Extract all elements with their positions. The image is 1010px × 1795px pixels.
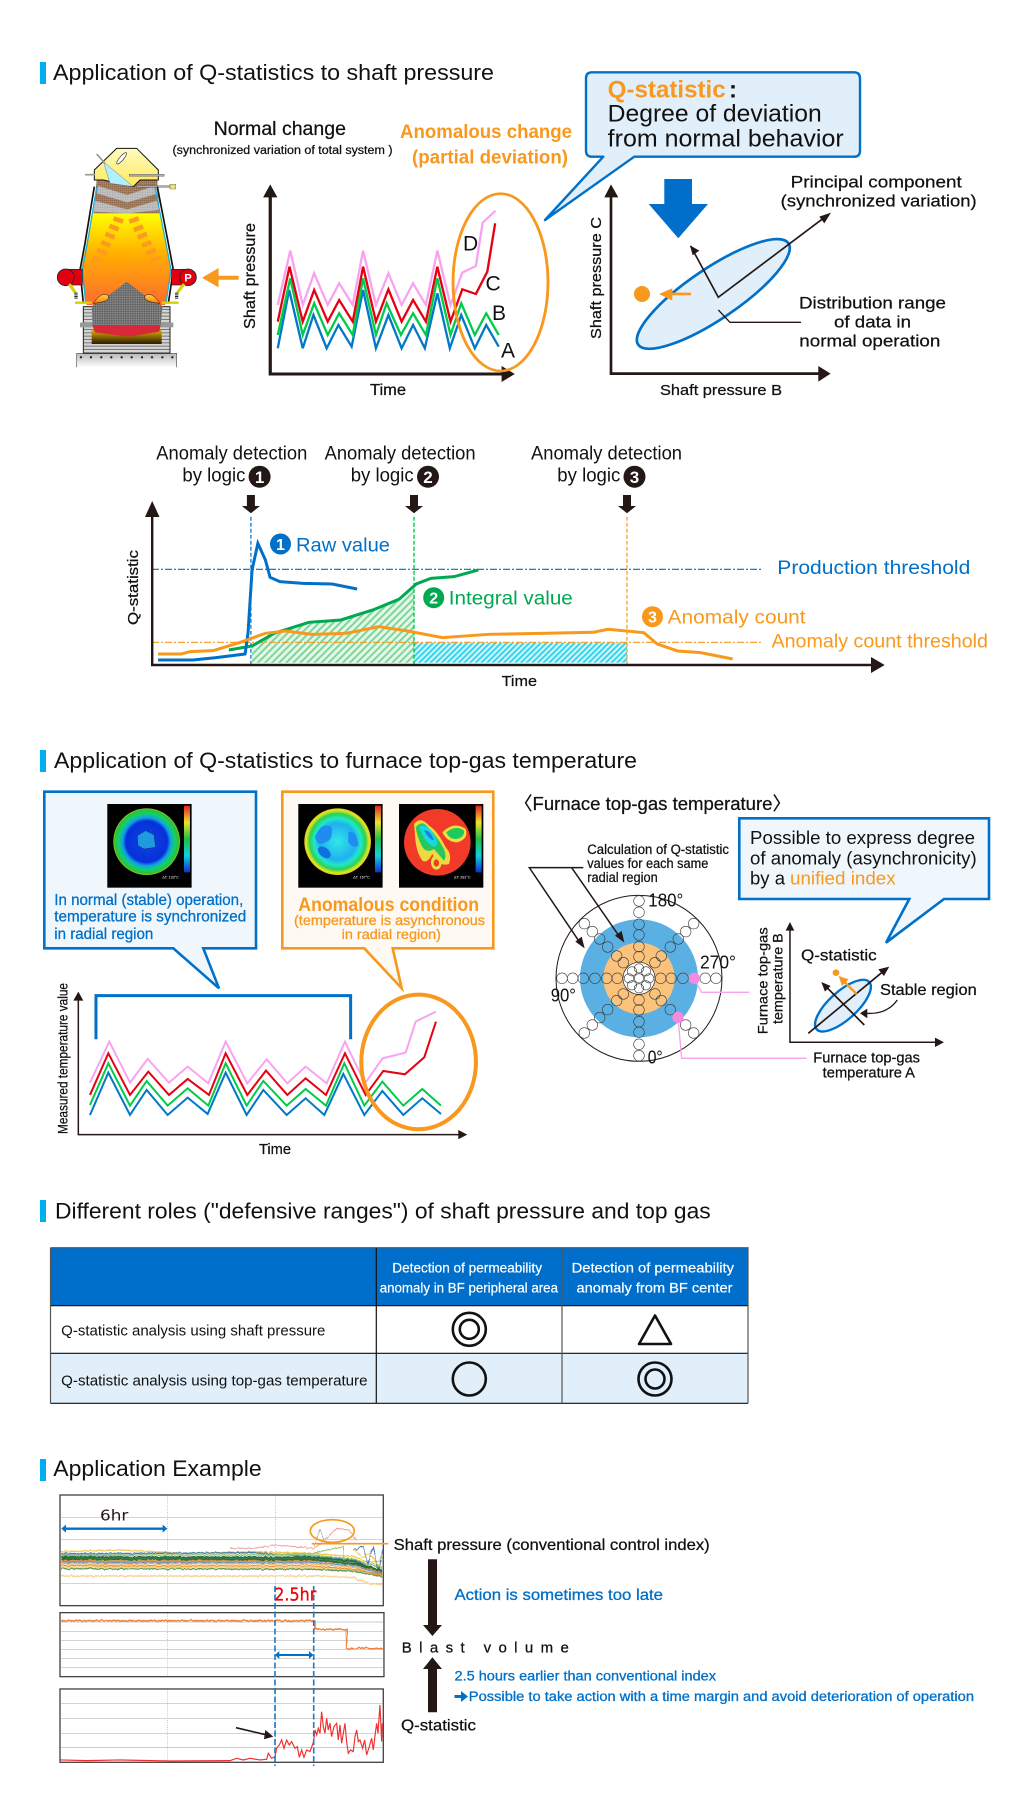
table: defensive ranges: Detection of permeability <box>572 1261 734 1276</box>
chart: Q-statistic scatter for top-gas temperature: temperature A <box>823 1066 915 1082</box>
callout: unified index: by a <box>750 867 786 888</box>
text: earlier action <box>454 1669 974 1704</box>
annotation: 2.5hr dashed markers <box>274 1585 317 1766</box>
arrow: big blue down <box>649 179 708 238</box>
callout: normal operation <box>44 792 256 988</box>
chart: Q-statistic scatter for top-gas temperature: Furnace top-gas <box>813 1051 920 1067</box>
chart: shaft pressure trends <box>60 1495 388 1606</box>
chart: principal component scatter: Shaft pressure C <box>588 217 605 339</box>
table: defensive ranges <box>50 1248 748 1403</box>
chart: Q-statistic scatter for top-gas temperature: temperature B <box>769 933 785 1024</box>
callout: unified index: Possible to express degree <box>750 827 975 848</box>
labels: anomaly detection by logic 1 2 3: by logic <box>182 466 245 487</box>
callout: Q-statistic definition <box>545 72 860 220</box>
callout: unified index: of anomaly (asynchronicity) <box>750 847 977 868</box>
callout: Q-statistic definition: from normal behavior <box>608 126 844 153</box>
labels: anomaly detection by logic 1 2 3 <box>156 443 682 488</box>
icon: blast furnace cross-section: P <box>184 272 192 284</box>
thermal image: stable <box>107 804 192 888</box>
chart: Q-statistic over time: Production threshold <box>777 557 970 579</box>
labels: anomaly detection by logic 1 2 3: by logic <box>557 466 620 487</box>
chart: shaft pressure over time: Shaft pressure <box>242 223 259 329</box>
symbol: triangle <box>639 1316 671 1344</box>
chart: principal component scatter <box>588 173 977 399</box>
label: normal change: Normal change <box>214 118 346 140</box>
chart: blast volume trend <box>60 1613 384 1677</box>
chart: measured temperature over time <box>56 983 476 1158</box>
heading: shaft pressure: Application of Q-statistics to shaft pressure <box>53 60 494 85</box>
diagram: furnace top-gas sensor layout: 90° <box>551 986 576 1006</box>
chart: shaft pressure over time: D <box>463 233 478 256</box>
chart: measured temperature over time: Measured temperature value <box>56 983 71 1134</box>
chart: shaft pressure over time <box>242 184 548 399</box>
chart: Q-statistic over time: 2 <box>429 591 438 608</box>
symbol: double circle row two <box>638 1362 672 1396</box>
label: anomalous change: (partial deviation) <box>412 148 568 168</box>
labels: anomaly detection by logic 1 2 3: by logic <box>351 466 414 487</box>
callout: anomalous condition <box>282 792 493 988</box>
chart: shaft pressure trends: 6hr <box>100 1507 129 1525</box>
text: earlier action: 2.5 hours earlier than conventional index <box>454 1669 716 1684</box>
diagram: furnace top-gas sensor layout: Calculation of Q-statistic <box>587 842 729 857</box>
chart: shaft pressure over time: B <box>492 302 506 325</box>
labels: anomaly detection by logic 1 2 3: Anomaly detection <box>325 443 476 464</box>
label: normal change: (synchronized variation of total system ) <box>172 145 393 157</box>
thermal image: transition: ΔT: 167°C <box>353 876 370 880</box>
callout: anomalous condition: (temperature is asynchronous <box>294 912 485 928</box>
chart: Q-statistic over time: Anomaly count <box>668 608 806 628</box>
callout: Q-statistic definition: : <box>729 76 737 103</box>
label: shaft pressure conventional index: Shaft pressure (conventional control index) <box>394 1537 710 1554</box>
diagram: furnace top-gas sensor layout: 0° <box>648 1047 663 1067</box>
text: action too late: Action is sometimes too late <box>454 1587 663 1604</box>
icon: blast furnace cross-section <box>57 148 196 367</box>
chart: shaft pressure over time: Time <box>370 382 406 399</box>
callout: Q-statistic definition: Degree of deviation <box>608 101 822 128</box>
chart: Q-statistic over time: Anomaly count threshold <box>772 631 988 652</box>
diagram: furnace top-gas sensor layout <box>529 842 807 1067</box>
thermal image: anomalous: ΔT: 281°C <box>454 876 471 880</box>
label: furnace top-gas temperature: 〈Furnace top-gas temperature〉 <box>514 793 791 814</box>
callout: unified index <box>739 818 989 943</box>
chart: principal component scatter: Distribution range <box>799 294 946 313</box>
heading: furnace top-gas temperature: Application of Q-statistics to furnace top-gas temperature <box>54 748 637 773</box>
callout: anomalous condition: Anomalous condition <box>298 895 479 916</box>
callout: normal operation: in radial region <box>54 926 153 943</box>
arrow: up to blast volume <box>423 1657 442 1712</box>
chart: principal component scatter: (synchronized variation) <box>781 192 977 211</box>
callout: unified index: unified index <box>790 867 896 888</box>
label: anomalous change: Anomalous change <box>400 122 572 143</box>
arrow: down to blast volume <box>423 1559 442 1636</box>
callout: Q-statistic definition: Q-statistic <box>608 76 726 103</box>
thermal image: anomalous <box>399 804 483 888</box>
symbol: double circle <box>453 1313 486 1346</box>
table: defensive ranges: anomaly in BF peripheral area <box>380 1281 558 1296</box>
labels: anomaly detection by logic 1 2 3: Anomaly detection <box>531 443 682 464</box>
chart: Q-statistic scatter for top-gas temperature: Furnace top-gas <box>755 927 771 1034</box>
heading: defensive ranges: Different roles ("defensive ranges") of shaft pressure and top gas <box>55 1198 711 1223</box>
diagram: furnace top-gas sensor layout: 270° <box>700 952 736 972</box>
label: normal change <box>172 118 393 157</box>
symbol: circle <box>453 1362 486 1396</box>
diagram: furnace top-gas sensor layout: values for each same <box>587 856 708 871</box>
heading: application example: Application Example <box>53 1456 262 1481</box>
chart: Q-statistic over time: Integral value <box>449 588 573 610</box>
thermal image: stable: ΔT: 133°C <box>162 876 179 880</box>
callout: normal operation: In normal (stable) operation, <box>54 892 243 909</box>
chart: principal component scatter: normal operation <box>799 332 940 351</box>
chart: Q-statistic over time: 3 <box>648 610 657 627</box>
callout: normal operation: temperature is synchronized <box>54 909 246 926</box>
chart: principal component scatter: of data in <box>834 313 911 332</box>
chart: Q-statistic over time: Q-statistic <box>126 550 142 625</box>
table: defensive ranges: anomaly from BF center <box>576 1281 733 1296</box>
annotation: 2.5hr dashed markers: 2.5hr <box>274 1585 317 1606</box>
diagram: furnace top-gas sensor layout: radial region <box>587 870 658 885</box>
label: Q-statistic: Q-statistic <box>401 1718 476 1735</box>
labels: anomaly detection by logic 1 2 3: 3 <box>630 468 639 487</box>
table: defensive ranges: Q-statistic analysis using shaft pressure <box>61 1324 325 1340</box>
chart: Q-statistic scatter for top-gas temperature <box>755 922 977 1082</box>
text: earlier action: Possible to take action with a time margin and avoid deterioration of operation <box>469 1689 974 1704</box>
thermal image: transition <box>298 804 383 888</box>
labels: anomaly detection by logic 1 2 3: 1 <box>255 468 264 487</box>
table: defensive ranges: Detection of permeability <box>392 1261 542 1276</box>
label: blast volume: Blast volume <box>402 1640 569 1657</box>
chart: Q-statistic scatter for top-gas temperature: Stable region <box>880 982 977 999</box>
chart: shaft pressure over time: A <box>501 339 515 362</box>
label: anomalous change <box>400 122 572 168</box>
chart: Q-statistic over time: Time <box>502 673 537 690</box>
chart: shaft pressure over time: C <box>486 273 501 296</box>
chart: Q-statistic trend <box>60 1689 383 1762</box>
callout: anomalous condition: in radial region) <box>342 926 441 942</box>
chart: Q-statistic over time: Raw value <box>296 536 390 557</box>
chart: principal component scatter: Principal component <box>791 173 962 192</box>
chart: principal component scatter: Shaft pressure B <box>660 382 782 399</box>
diagram: furnace top-gas sensor layout: 180° <box>648 891 683 911</box>
table: defensive ranges: Q-statistic analysis using top-gas temperature <box>61 1374 367 1390</box>
arrow: pressure from furnace <box>202 268 239 287</box>
chart: Q-statistic scatter for top-gas temperature: Q-statistic <box>801 948 877 965</box>
labels: anomaly detection by logic 1 2 3: Anomaly detection <box>156 443 307 464</box>
chart: measured temperature over time: Time <box>259 1142 291 1158</box>
chart: Q-statistic over time <box>126 495 988 690</box>
chart: Q-statistic over time: 1 <box>276 537 285 554</box>
labels: anomaly detection by logic 1 2 3: 2 <box>423 468 433 487</box>
